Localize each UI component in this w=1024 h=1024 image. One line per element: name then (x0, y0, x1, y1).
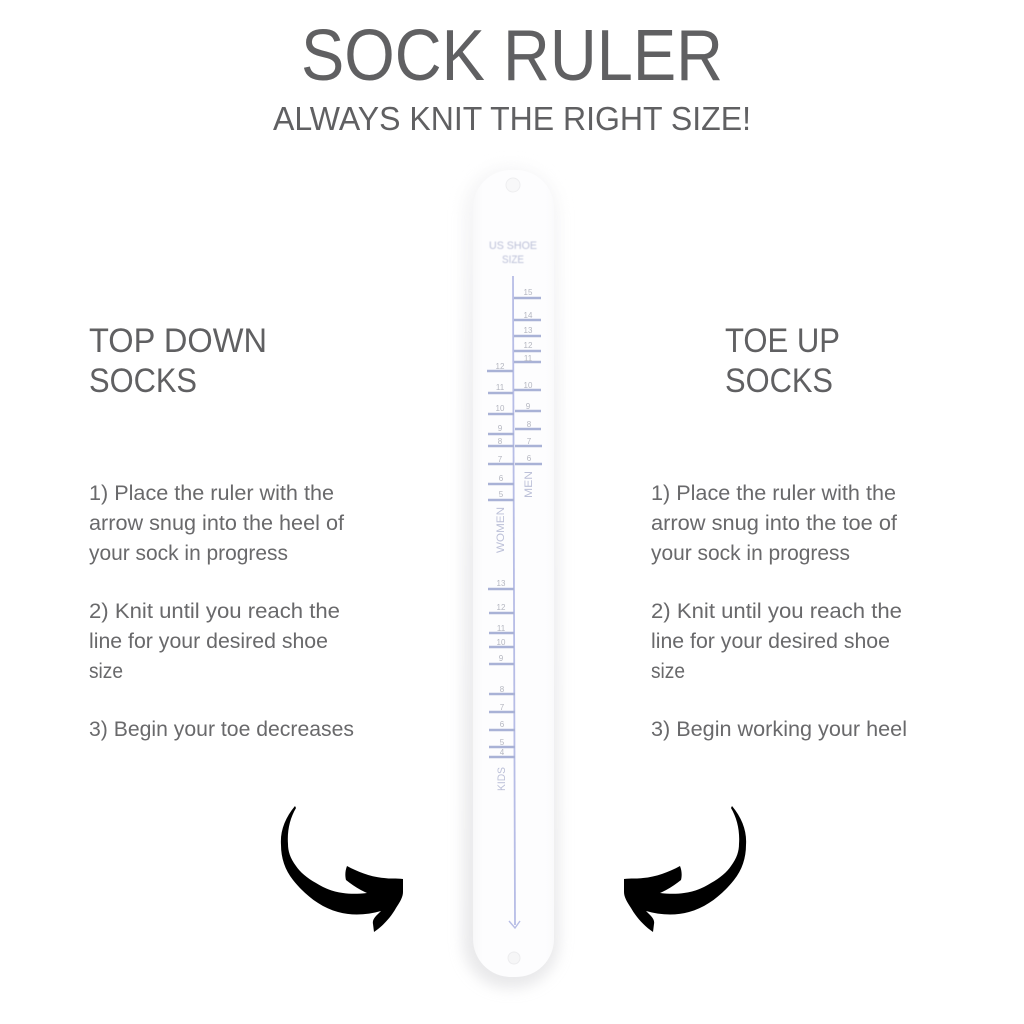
men's size scale: 13 (524, 326, 533, 335)
step 1 (651, 482, 897, 565)
women's size scale: 7 (498, 455, 503, 464)
step 2: size (651, 660, 685, 683)
top hole (506, 178, 520, 192)
ruler shadow (463, 166, 559, 988)
kids' size scale: 13 (497, 579, 506, 588)
ruler (463, 166, 559, 988)
step 1: 1) Place the ruler with the (89, 482, 334, 505)
step 2: line for your desired shoe (89, 630, 328, 653)
men's size scale: 7 (527, 437, 532, 446)
kids' size scale: 10 (497, 638, 506, 647)
step 1: arrow snug into the toe of (651, 512, 897, 535)
step 2 (651, 600, 902, 683)
step 2: size (89, 660, 123, 683)
heading: toe up socks: SOCKS (725, 362, 833, 400)
step 1: arrow snug into the heel of (89, 512, 344, 535)
step 2: 2) Knit until you reach the (651, 600, 902, 623)
women's size scale: 9 (498, 424, 503, 433)
heading: top down socks: TOP DOWN (89, 322, 267, 360)
men's size scale: 9 (526, 402, 531, 411)
label: us shoe size: SIZE (502, 254, 524, 266)
women's size scale: 10 (496, 404, 505, 413)
men's size scale: 15 (524, 288, 533, 297)
step 2: 2) Knit until you reach the (89, 600, 340, 623)
centre line with arrow (509, 276, 520, 928)
women's size scale: 6 (499, 474, 504, 483)
label: us shoe size (489, 240, 537, 266)
kids' size scale (488, 579, 515, 757)
label: kids: KIDS (496, 767, 508, 791)
heading: toe up socks (725, 322, 840, 400)
label: us shoe size: US SHOE (489, 240, 537, 252)
step 1 (89, 482, 344, 565)
women's size scale (487, 362, 514, 500)
women's size scale: 12 (496, 362, 505, 371)
step 3: 3) Begin working your heel (651, 718, 907, 741)
men's size scale: 6 (527, 454, 532, 463)
arrow: left pointing to ruler (281, 806, 403, 932)
heading: top down socks: SOCKS (89, 362, 197, 400)
arrow: right pointing to ruler (624, 806, 746, 932)
men's size scale: 14 (524, 311, 533, 320)
heading: toe up socks: TOE UP (725, 322, 840, 360)
men's size scale: 11 (524, 354, 533, 363)
kids' size scale: 12 (497, 603, 506, 612)
women's size scale: 5 (499, 490, 504, 499)
step 3: 3) Begin your toe decreases (89, 718, 354, 741)
kids' size scale: 9 (499, 654, 504, 663)
subtitle: ALWAYS KNIT THE RIGHT SIZE! (273, 100, 751, 137)
step 1: 1) Place the ruler with the (651, 482, 896, 505)
panel: top down instructions (89, 322, 354, 741)
women's size scale: 8 (498, 437, 503, 446)
step 1: your sock in progress (651, 542, 850, 565)
kids' size scale: 5 (500, 738, 505, 747)
ruler body (473, 170, 554, 977)
label: men: MEN (523, 471, 535, 498)
men's size scale: 12 (524, 341, 533, 350)
men's size scale: 8 (527, 420, 532, 429)
kids' size scale: 4 (500, 748, 505, 757)
kids' size scale: 6 (500, 720, 505, 729)
women's size scale: 11 (496, 383, 505, 392)
step 1: your sock in progress (89, 542, 288, 565)
heading: top down socks (89, 322, 267, 400)
men's size scale (514, 288, 542, 464)
title: SOCK RULER (301, 16, 723, 96)
kids' size scale: 8 (500, 685, 505, 694)
panel: toe up instructions (651, 322, 907, 741)
label: women: WOMEN (495, 507, 507, 553)
step 2 (89, 600, 340, 683)
bottom hole (508, 952, 520, 964)
kids' size scale: 11 (497, 624, 506, 633)
step 2: line for your desired shoe (651, 630, 890, 653)
men's size scale: 10 (524, 381, 533, 390)
kids' size scale: 7 (500, 703, 505, 712)
